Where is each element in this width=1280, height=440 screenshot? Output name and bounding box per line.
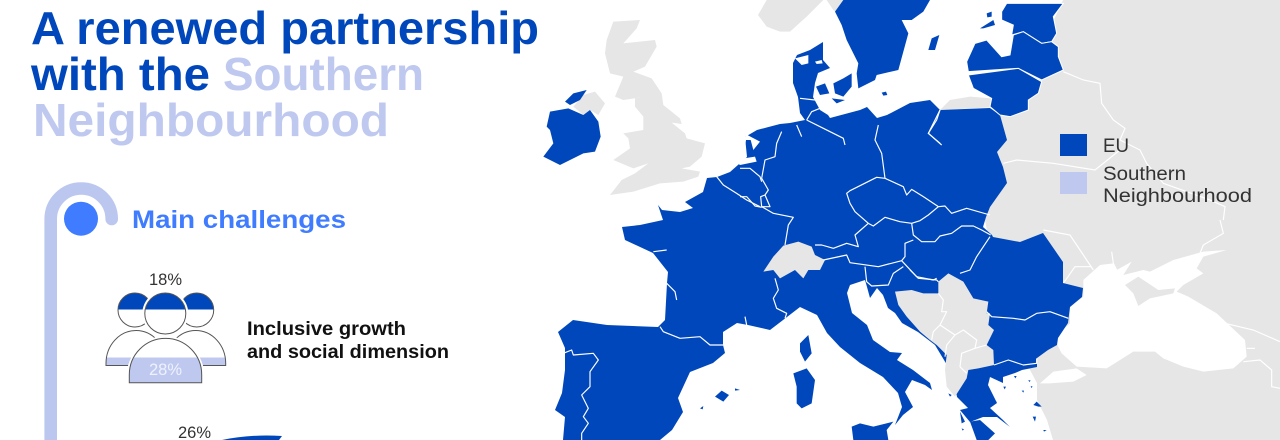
value: 18%: 18% (149, 271, 182, 289)
value: 28%: 28% (149, 361, 182, 379)
left person (106, 292, 156, 366)
legend swatch: Southern Neighbourhood (1060, 172, 1087, 194)
non-EU land east (985, 0, 1280, 440)
label: inclusive growth and social dimension: and social dimension (247, 342, 449, 363)
legend label: Southern Neighbourhood: Southern (1103, 164, 1186, 185)
icon: people with percentages (106, 271, 226, 385)
legend (1060, 134, 1252, 207)
legend label: EU: EU (1103, 136, 1129, 157)
Mediterranean islands (700, 335, 815, 409)
national borders (563, 98, 1068, 440)
legend swatch: EU (1060, 134, 1087, 156)
Switzerland (763, 242, 825, 278)
right person (176, 292, 226, 366)
Ireland (543, 90, 601, 165)
title: Southern (223, 48, 424, 100)
Sweden (835, 0, 930, 88)
United Kingdom (573, 20, 705, 195)
title: Neighbourhood (33, 94, 389, 146)
title: A renewed partnership (31, 2, 539, 54)
heading: main challenges: Main challenges (132, 206, 346, 234)
timeline dot (64, 202, 98, 236)
icon: partly cropped blue arc (222, 436, 282, 440)
Sicily, Peloponnese and Greek islands (852, 376, 1047, 440)
timeline arch (51, 189, 112, 440)
title: with the (30, 48, 210, 100)
Baltic states (967, 3, 1063, 117)
map of Europe (543, 0, 1280, 440)
label: inclusive growth and social dimension: Inclusive growth (247, 319, 406, 340)
Norway (758, 0, 843, 32)
legend label: Southern Neighbourhood: Neighbourhood (1103, 186, 1252, 207)
label: inclusive growth and social dimension (247, 319, 449, 363)
EU mainland (555, 42, 1083, 440)
Kaliningrad (940, 97, 992, 110)
Estonian islands (980, 12, 995, 28)
inland water (733, 48, 913, 165)
Danish islands (816, 35, 939, 103)
centre person (126, 290, 204, 385)
Western Balkans (895, 273, 994, 397)
title (30, 2, 539, 146)
